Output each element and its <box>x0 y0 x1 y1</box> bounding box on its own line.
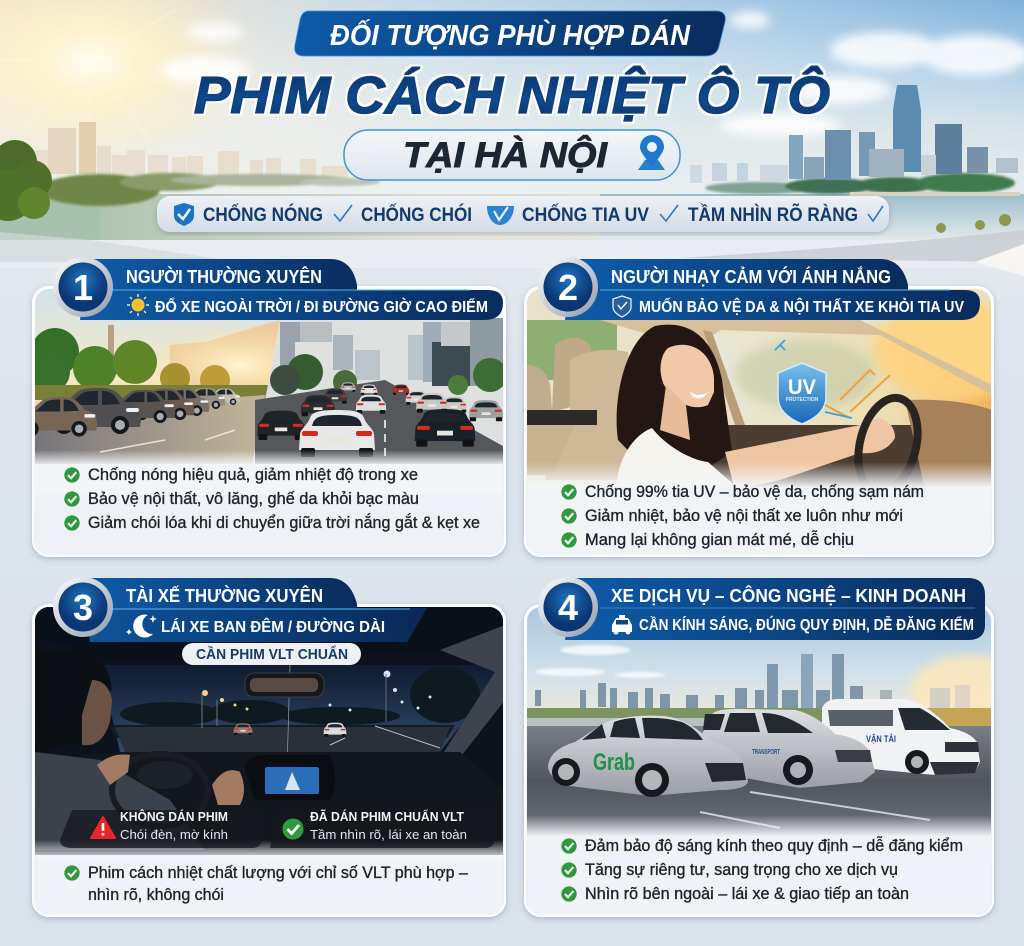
title banner: ĐỐI TƯỢNG PHÙ HỢP DÁN <box>330 18 691 52</box>
number badge 1 <box>53 257 113 317</box>
photo: service vehicles <box>527 607 991 835</box>
benefits bar: TẦM NHÌN RÕ RÀNG <box>688 204 858 226</box>
right skyline <box>690 85 1018 183</box>
icon: round shield <box>487 206 514 225</box>
icon: UV shield <box>775 340 890 424</box>
header ribbon: MUỐN BẢO VỆ DA & NỘI THẤT XE KHỎI TIA UV <box>639 296 964 316</box>
bullet list <box>64 864 469 904</box>
header ribbon: TÀI XẾ THƯỜNG XUYÊN <box>126 585 323 606</box>
header ribbon <box>565 259 980 320</box>
caption: with film: ĐÃ DÁN PHIM CHUẨN VLT <box>310 809 464 824</box>
title banner <box>295 11 725 56</box>
panel: card 2 <box>525 257 1024 556</box>
bullet list: Đảm bảo độ sáng kính theo quy định – dễ đăng kiểm <box>585 836 963 855</box>
bullet list: Phim cách nhiệt chất lượng với chỉ số VLT phù hợp – <box>88 864 469 882</box>
header ribbon <box>80 259 503 320</box>
bullet list: Chống 99% tia UV – bảo vệ da, chống sạm nám <box>585 483 924 501</box>
location pill <box>344 130 680 180</box>
header ribbon <box>84 578 427 665</box>
woman <box>617 325 895 490</box>
tree <box>0 140 52 221</box>
bullet list: Giảm chói lóa khi di chuyển giữa trời nắng gắt & kẹt xe <box>88 513 480 532</box>
bullet list: Giảm nhiệt, bảo vệ nội thất xe luôn như mới <box>585 507 903 525</box>
icon: shield check <box>174 203 194 226</box>
number badge 1: 1 <box>73 267 93 308</box>
number badge 3 <box>53 577 113 637</box>
icon: warning <box>91 817 115 838</box>
header ribbon <box>565 578 985 640</box>
caption: with film <box>270 809 495 848</box>
lake <box>0 194 1024 240</box>
benefits bar: CHỐNG TIA UV <box>522 204 649 226</box>
bullet list <box>64 466 480 532</box>
number badge 3: 3 <box>73 587 93 628</box>
bullet list <box>561 483 924 549</box>
icon: moon <box>126 615 157 638</box>
VLT pill: CẦN PHIM VLT CHUẨN <box>196 645 348 663</box>
bullet list: Chống nóng hiệu quả, giảm nhiệt độ trong xe <box>88 466 418 484</box>
bullet list: Tăng sự riêng tư, sang trọng cho xe dịch vụ <box>585 861 898 879</box>
icon: map pin <box>638 135 665 170</box>
photo: woman driving with UV shield <box>527 289 1024 556</box>
sedan <box>548 716 748 797</box>
header ribbon: LÁI XE BAN ĐÊM / ĐƯỜNG DÀI <box>161 617 385 636</box>
location pill: TẠI HÀ NỘI <box>403 135 608 175</box>
caption: with film: Tầm nhìn rõ, lái xe an toàn <box>310 828 467 842</box>
bullet list: Nhìn rõ bên ngoài – lái xe & giao tiếp an toàn <box>585 885 909 903</box>
left skyline <box>30 122 348 180</box>
photo: night driving <box>35 607 503 859</box>
panel: card 3 <box>33 577 505 916</box>
bullet list: nhìn rõ, không chói <box>88 886 224 904</box>
benefits bar: CHỐNG CHÓI <box>361 204 472 226</box>
header ribbon: NGƯỜI NHẠY CẢM VỚI ÁNH NẮNG <box>611 266 891 287</box>
sedan: Grab <box>593 749 635 776</box>
SUV <box>700 709 875 788</box>
caption: without film <box>60 809 262 848</box>
number badge 4 <box>538 577 598 637</box>
header ribbon: XE DỊCH VỤ – CÔNG NGHỆ – KINH DOANH <box>611 585 966 606</box>
icon: taxi <box>612 615 632 634</box>
icon: sun <box>127 294 149 316</box>
main title: PHIM CÁCH NHIỆT Ô TÔ <box>194 66 830 125</box>
rear-view mirror <box>245 673 324 697</box>
number badge 2: 2 <box>558 267 578 308</box>
number badge 2 <box>538 257 598 317</box>
icon: small shield <box>613 296 631 317</box>
header ribbon: NGƯỜI THƯỜNG XUYÊN <box>126 266 322 287</box>
bullet list <box>561 836 963 903</box>
driver <box>35 650 244 850</box>
van <box>822 699 980 775</box>
SUV: TRANSPORT <box>752 749 780 756</box>
caption: without film: Chói đèn, mờ kính <box>120 828 228 842</box>
header ribbon: CẦN KÍNH SÁNG, ĐÚNG QUY ĐỊNH, DỄ ĐĂNG KIỂM <box>639 615 974 634</box>
panel: card 4 <box>525 577 1024 916</box>
icon: UV shield: PROTECTION <box>786 397 819 403</box>
panel: card 1 <box>14 257 510 560</box>
icon: UV shield: UV <box>788 376 816 399</box>
number badge 4: 4 <box>558 587 578 628</box>
bullet list: Bảo vệ nội thất, vô lăng, ghế da khỏi bạc màu <box>88 490 419 508</box>
benefits bar: CHỐNG NÓNG <box>203 204 323 226</box>
caption: without film: KHÔNG DÁN PHIM <box>120 809 228 824</box>
header ribbon: ĐỔ XE NGOÀI TRỜI / ĐI ĐƯỜNG GIỜ CAO ĐIỂM <box>155 297 488 316</box>
van: VẬN TẢI <box>866 733 896 744</box>
photo: parking and traffic <box>35 289 503 464</box>
benefits bar <box>157 196 889 232</box>
bullet list: Mang lại không gian mát mé, dễ chịu <box>585 530 854 549</box>
